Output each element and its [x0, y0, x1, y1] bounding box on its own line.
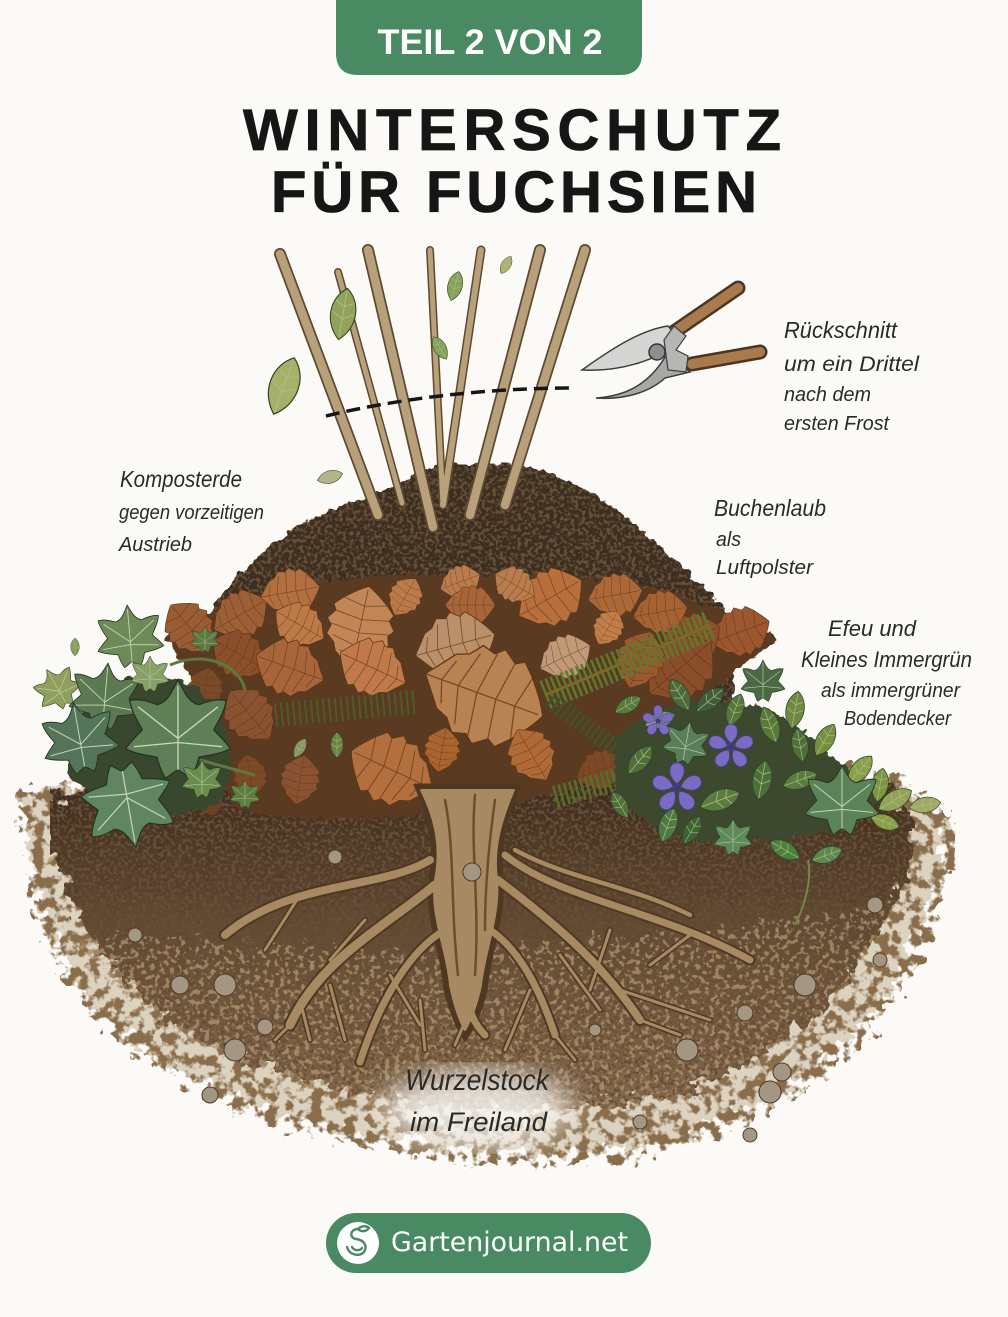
label: pruning: um ein Drittel	[784, 353, 920, 376]
label: compost soil	[118, 466, 264, 556]
label: pruning: nach dem	[784, 384, 871, 406]
label: compost soil: Austrieb	[118, 534, 192, 556]
fern sprig left	[275, 702, 415, 715]
label: rootstock: Wurzelstock	[405, 1064, 551, 1097]
label: pruning	[784, 317, 920, 435]
cut line	[326, 388, 572, 416]
label: rootstock: im Freiland	[410, 1107, 548, 1137]
title	[243, 98, 781, 225]
label: compost soil: gegen vorzeitigen	[119, 502, 264, 524]
stem leaves	[260, 254, 515, 486]
fern sprigs	[545, 625, 710, 797]
leaf layer: beech leaves	[152, 555, 778, 822]
label: pruning: Rückschnitt	[784, 317, 899, 343]
compost mound	[205, 463, 735, 720]
label: rootstock	[405, 1064, 551, 1137]
footer badge	[326, 1213, 651, 1273]
periwinkle flowers	[642, 705, 755, 813]
title: FÜR FUCHSIEN	[271, 160, 757, 225]
label: pruning: ersten Frost	[784, 413, 890, 435]
pruned stems	[280, 250, 585, 527]
rootstock	[225, 785, 750, 1062]
label: ivy and periwinkle: Efeu und	[828, 616, 917, 641]
label: ivy and periwinkle	[801, 616, 972, 730]
label: compost soil: Komposterde	[120, 466, 242, 492]
banner: part label: TEIL 2 VON 2	[378, 23, 602, 62]
label: beech leaves: als	[716, 529, 741, 551]
footer badge: Gartenjournal.net	[391, 1227, 628, 1258]
icon: pruning shears	[582, 288, 760, 398]
label: ivy and periwinkle: als immergrüner	[821, 680, 961, 702]
ivy ground cover left	[27, 602, 260, 855]
title: WINTERSCHUTZ	[243, 98, 781, 163]
label: beech leaves: Luftpolster	[716, 557, 814, 579]
label: beech leaves: Buchenlaub	[714, 495, 826, 521]
soil cross-section	[19, 760, 956, 1166]
periwinkle and ivy ground cover right	[606, 660, 942, 925]
label: ivy and periwinkle: Bodendecker	[844, 708, 952, 730]
label: beech leaves	[714, 495, 826, 579]
pale patch behind root label	[383, 1070, 573, 1146]
stones in soil	[128, 850, 887, 1142]
label: ivy and periwinkle: Kleines Immergrün	[801, 647, 972, 672]
banner: part label	[336, 0, 642, 75]
